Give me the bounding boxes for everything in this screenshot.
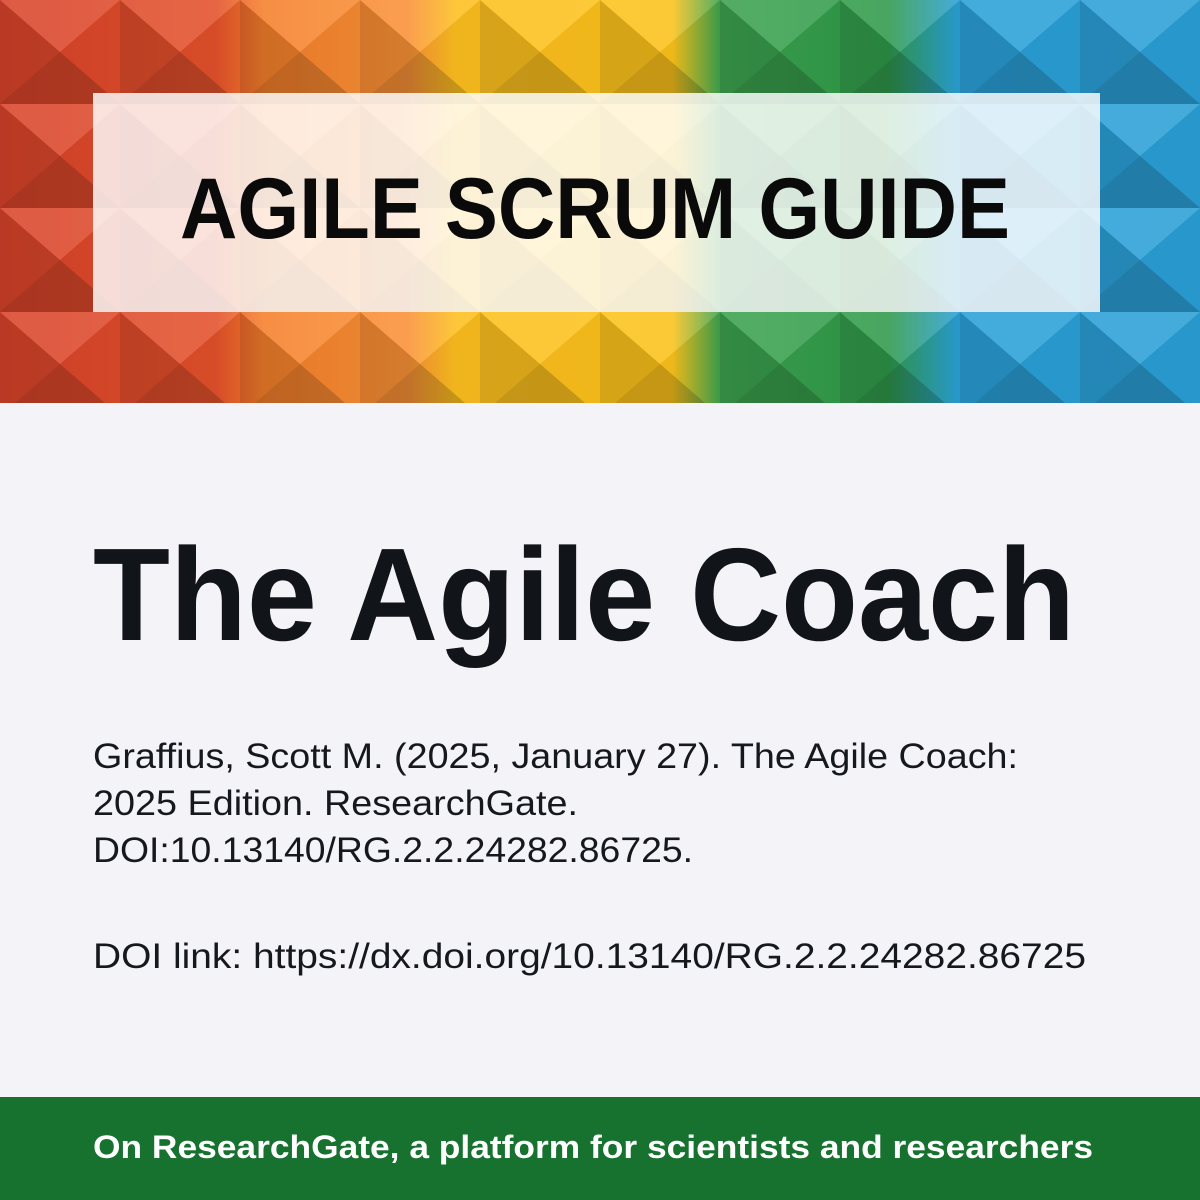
citation text [93, 737, 1086, 976]
heading: The Agile Coach: The Agile Coach [93, 521, 1075, 668]
footer banner [0, 1097, 1200, 1200]
content panel [0, 403, 1200, 1097]
citation text: Graffius, Scott M. (2025, January 27). The Agile Coach: [93, 737, 1018, 776]
citation text: DOI link: https://dx.doi.org/10.13140/RG.2.2.24282.86725 [93, 937, 1086, 976]
header image: origami background [0, 0, 1200, 403]
citation text: DOI:10.13140/RG.2.2.24282.86725. [93, 831, 693, 870]
title box [93, 93, 1100, 312]
title: AGILE SCRUM GUIDE: AGILE SCRUM GUIDE [180, 161, 1010, 257]
footer banner: On ResearchGate, a platform for scientists and researchers [93, 1129, 1093, 1165]
citation text: 2025 Edition. ResearchGate. [93, 784, 578, 823]
